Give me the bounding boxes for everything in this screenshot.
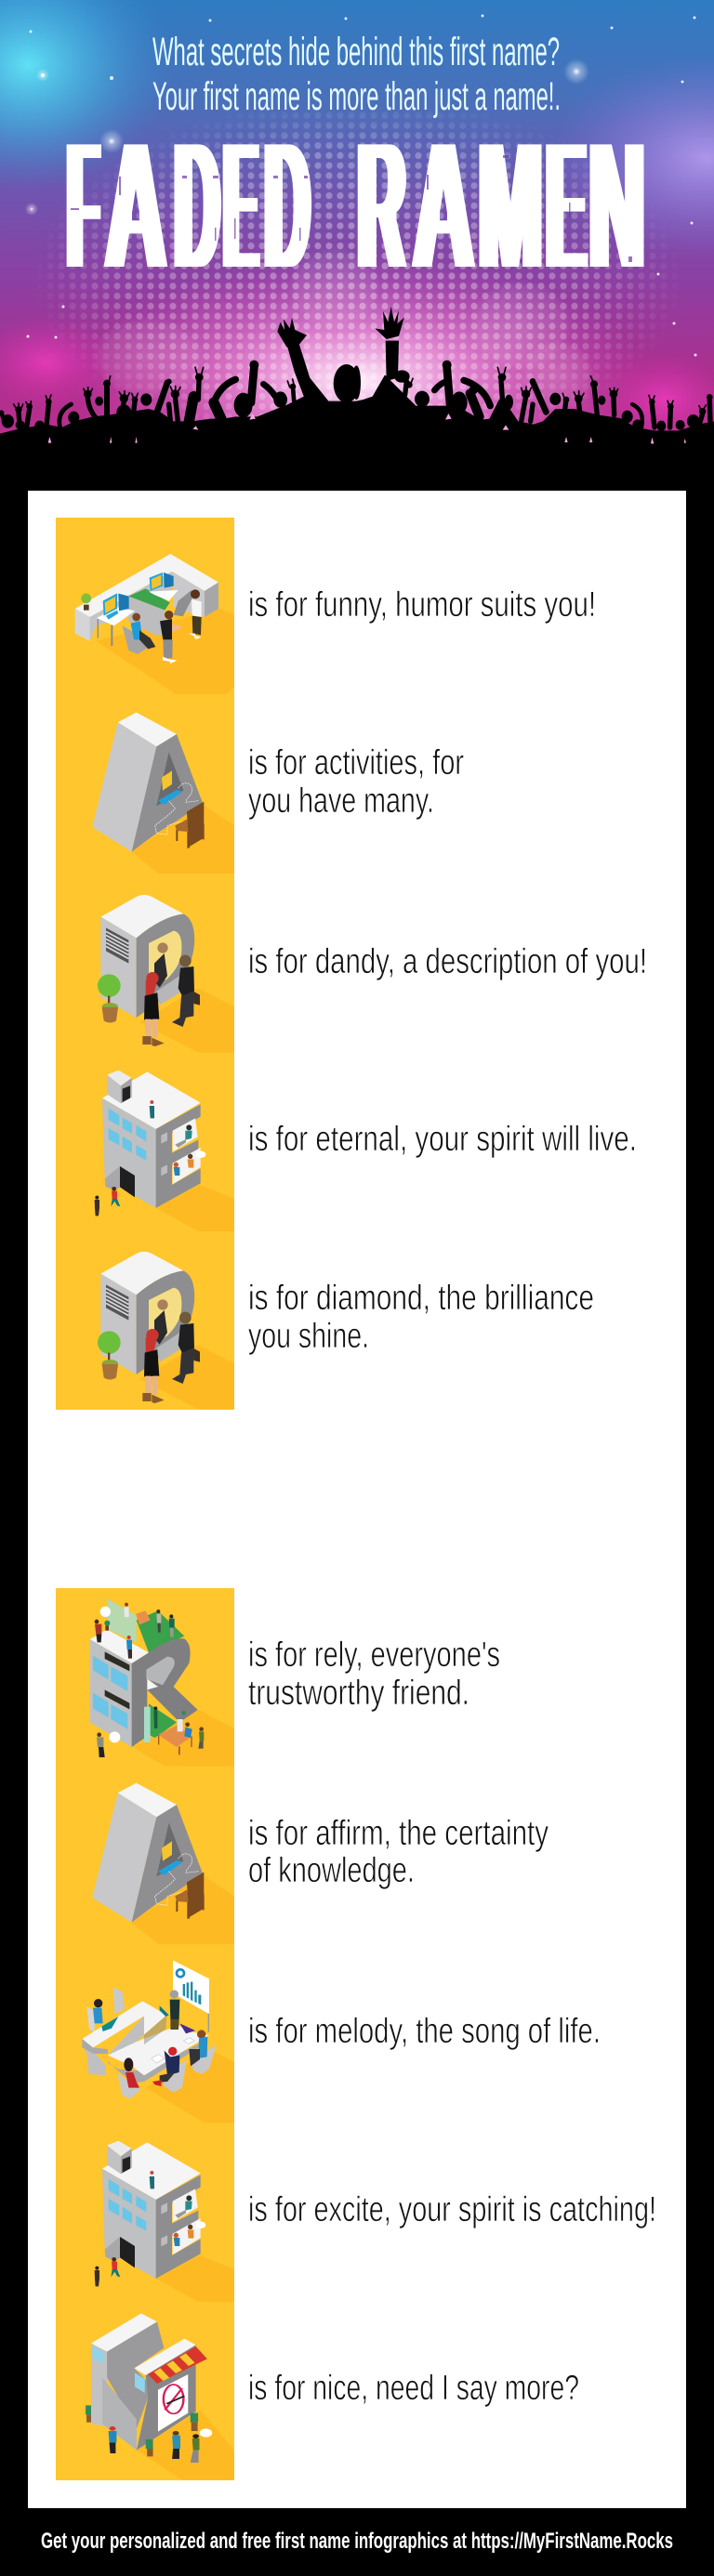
row: letter N: [56, 2302, 579, 2480]
row text: [248, 1279, 594, 1356]
row text: you shine.: [248, 1317, 369, 1356]
row: letter D second: [56, 1231, 594, 1410]
white content panel: [28, 491, 686, 2508]
row text: is for nice, need I say more?: [248, 2369, 579, 2408]
illustration: office desks: [56, 518, 234, 696]
illustration: letter M meeting: [56, 1945, 234, 2123]
row: letter M: [56, 1945, 601, 2123]
illustration: letter E building: [56, 1053, 234, 1231]
title: name: A: [105, 100, 166, 311]
row text: is for rely, everyone's: [248, 1636, 500, 1675]
title: name: E: [224, 100, 258, 311]
illustration: letter N shop: [56, 2302, 234, 2480]
row: letter E: [56, 1053, 637, 1231]
row text: [248, 1814, 549, 1890]
row text: is for melody, the song of life.: [248, 2012, 601, 2051]
row text: is for affirm, the certainty: [248, 1814, 549, 1853]
crowd silhouette: [0, 307, 714, 493]
row: letter E second: [56, 2123, 656, 2302]
row: letter R: [56, 1588, 500, 1767]
title: name: A: [413, 100, 474, 311]
row text: [248, 1636, 500, 1713]
row text: you have many.: [248, 782, 434, 821]
title: name: [68, 100, 644, 311]
row: letter D: [56, 874, 647, 1053]
illustration: letter D: [56, 874, 234, 1053]
title: name: D: [265, 100, 310, 311]
title: name: E: [547, 100, 586, 311]
title: name: D: [175, 100, 219, 311]
row: letter A: [56, 696, 464, 874]
row text: of knowledge.: [248, 1851, 415, 1890]
row text: trustworthy friend.: [248, 1674, 469, 1713]
row text: is for activities, for: [248, 743, 464, 782]
row text: [248, 743, 464, 821]
black floor under crowd: [0, 437, 714, 493]
title: name: M: [479, 100, 542, 311]
row text: is for funny, humor suits you!: [248, 585, 596, 624]
crowd left half: [0, 318, 360, 458]
title: name: R: [358, 100, 405, 311]
illustration: letter E building: [56, 2123, 234, 2302]
row: letter A second: [56, 1767, 549, 1945]
row: letter F: [56, 518, 596, 696]
illustration: letter D: [56, 1231, 234, 1410]
title: name: F: [68, 100, 99, 311]
row text: is for diamond, the brilliance: [248, 1279, 594, 1318]
illustration: letter R: [56, 1588, 234, 1767]
illustration: letter A: [56, 1767, 234, 1945]
crowd right half: [352, 307, 714, 458]
illustration: letter A: [56, 696, 234, 874]
